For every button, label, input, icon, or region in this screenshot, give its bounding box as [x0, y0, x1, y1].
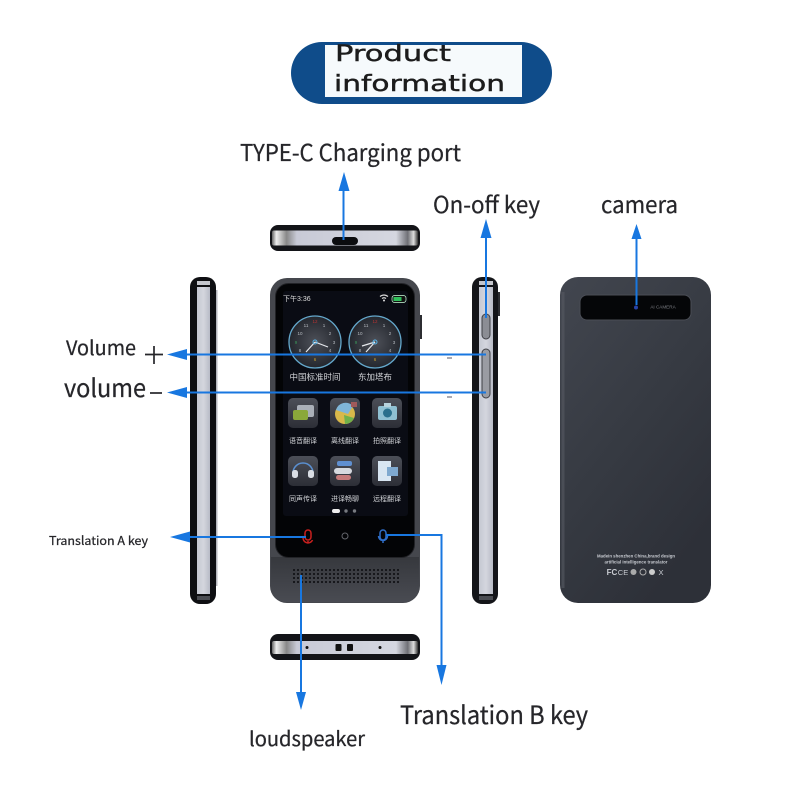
world clock: Tongatapu: 9: [355, 340, 358, 345]
world clock: China: 3: [333, 340, 336, 345]
status bar: [283, 294, 406, 303]
world clock: Tongatapu: 8: [359, 348, 362, 353]
camera module: [580, 295, 691, 320]
title badge: Product: [335, 42, 452, 67]
world clock: China: 12: [312, 319, 318, 324]
camera module: AI CAMERA: [650, 304, 677, 310]
world clock: China: 8: [299, 348, 302, 353]
world clock: Tongatapu: 10: [357, 331, 363, 336]
world clock: Tongatapu: 3: [393, 340, 396, 345]
world clock: China: 1: [323, 323, 326, 328]
app icon: voice translation: [288, 398, 318, 428]
world clock: China: 11: [304, 323, 309, 328]
app labels row one: 语音翻译: [289, 436, 317, 445]
label: volume minus: volume: [64, 369, 146, 405]
arrow: camera: [632, 224, 642, 305]
label: translation B key: Translation B key: [400, 696, 588, 732]
arrow: translation B key: [386, 535, 446, 685]
label: camera: camera: [601, 186, 678, 220]
label: on-off key: On-off key: [433, 186, 540, 220]
page indicator: [332, 509, 356, 513]
speaker grille: [292, 569, 399, 583]
app icon: chat translation: [330, 456, 360, 486]
back print text: artificial intelligence translator: [604, 560, 668, 564]
app labels row two: 进译畅聊: [331, 494, 359, 503]
app labels row one: [289, 436, 401, 445]
left side view of device: [190, 277, 218, 604]
app labels row two: 远程翻译: [373, 494, 401, 503]
translation B mic button: [378, 530, 388, 543]
app icon: photo translation: [372, 398, 402, 428]
translation A mic button: [303, 530, 312, 543]
app labels row one: 拍照翻译: [373, 436, 401, 445]
back print text: X: [658, 568, 664, 577]
bottom view of device: [270, 634, 420, 660]
label: volume plus: [66, 332, 163, 364]
status bar: 下午3:36: [283, 294, 311, 303]
right side view of device: [472, 277, 500, 604]
world clock: Tongatapu: [349, 316, 401, 368]
app icon: simultaneous interpretation: [288, 456, 318, 486]
arrow: loudspeaker: [296, 575, 306, 710]
app labels row two: [289, 494, 401, 503]
back print text: FC: [607, 568, 618, 577]
home button: [342, 533, 348, 539]
world clock: Tongatapu: 12: [372, 319, 378, 324]
back print text: [597, 554, 675, 577]
world clock: Tongatapu: 6: [374, 357, 377, 362]
label: volume plus: Volume: [66, 332, 136, 361]
back view of device: [560, 277, 711, 603]
world clock: China: 6: [314, 357, 317, 362]
world clock: China: 4: [329, 348, 332, 353]
front view of device: [270, 278, 422, 603]
world clock: China: 2: [329, 331, 332, 336]
top view of device: [270, 225, 420, 251]
app labels row two: 同声传译: [289, 494, 317, 503]
world clock: Tongatapu: 11: [364, 323, 369, 328]
label: translation A key: Translation A key: [49, 532, 149, 549]
world clock: China: 10: [297, 331, 303, 336]
title badge: information: [334, 72, 505, 97]
arrow: on-off key: [480, 219, 492, 318]
label: TYPE-C charging port: TYPE-C Charging port: [240, 134, 461, 168]
title badge: [291, 42, 552, 104]
app icon: offline translation: [330, 398, 360, 428]
clock labels: [289, 372, 392, 382]
arrow: TYPE-C port: [338, 172, 350, 240]
clock labels: 中国标准时间: [289, 372, 341, 382]
world clock: Tongatapu: 1: [383, 323, 386, 328]
app labels row one: 离线翻译: [331, 436, 359, 445]
world clock: Tongatapu: 4: [389, 348, 392, 353]
app icon: remote translation: [372, 456, 402, 486]
volume tick marks: [447, 358, 452, 397]
back print text: CE: [618, 568, 628, 577]
label: loudspeaker: loudspeaker: [249, 723, 365, 752]
world clock: Tongatapu: 2: [389, 331, 392, 336]
world clock: China: [289, 316, 341, 368]
arrow: translation A key: [170, 532, 306, 542]
arrow: volume plus: [167, 349, 486, 360]
clock labels: 东加塔布: [358, 372, 392, 382]
world clock: China: 9: [295, 340, 298, 345]
back print text: Madein shenzhen China,brand design: [597, 554, 675, 558]
arrow: volume minus: [167, 387, 486, 398]
